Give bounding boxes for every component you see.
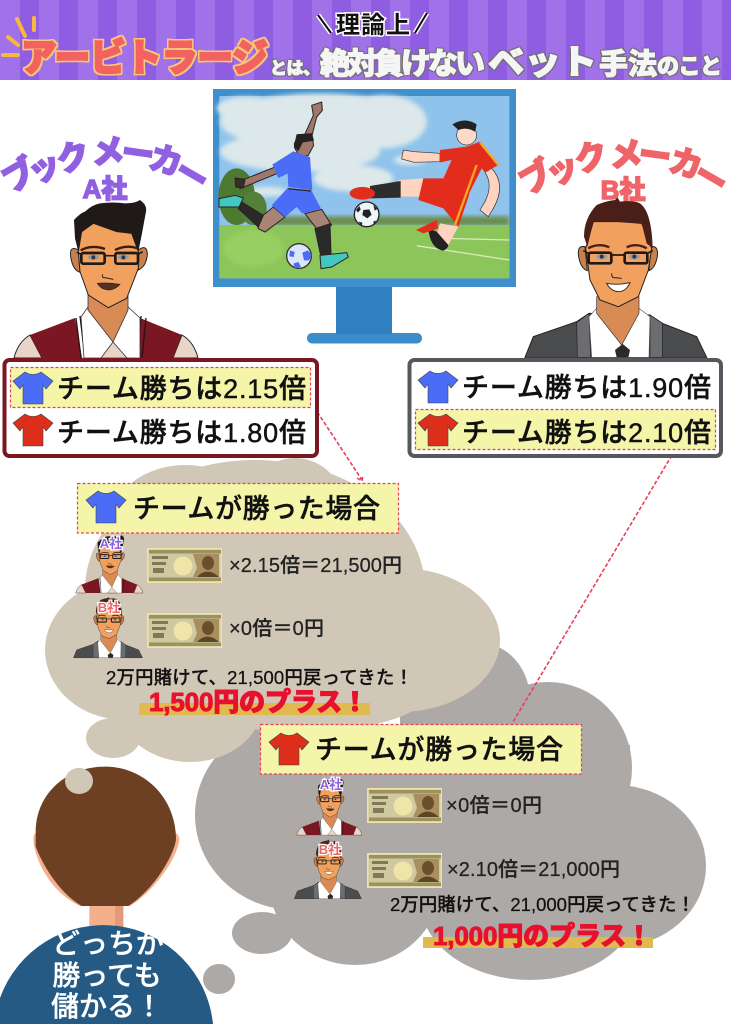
bookmaker A title: ー <box>168 151 215 200</box>
heading: arbitrage: アービトラージ <box>21 37 268 80</box>
row: B payout: ×0倍＝0円 <box>229 617 324 640</box>
highlighted row <box>10 368 310 408</box>
scenario: red team wins <box>260 724 695 951</box>
row: B payout <box>294 840 620 899</box>
person seen from behind <box>0 767 213 1024</box>
connector lines <box>314 407 675 722</box>
row: A payout: ×0倍＝0円 <box>446 794 542 817</box>
icon: red shirt <box>418 414 458 446</box>
heading: theoretically <box>318 12 427 39</box>
monitor with football match <box>213 89 516 344</box>
heading: definition: 手法 <box>599 48 657 81</box>
row: B payout <box>73 597 324 658</box>
icon: blue shirt <box>13 372 53 404</box>
odds: blue team: チーム勝ちは2.15倍 <box>57 374 306 404</box>
red player <box>350 120 500 251</box>
icon: yellow rays <box>3 18 34 55</box>
bookmaker B title: ッ <box>540 146 584 193</box>
odds: red team: チーム勝ちは2.10倍 <box>462 418 711 448</box>
label: チームが勝った場合 <box>315 735 563 765</box>
bookmaker B title: ブ <box>513 153 560 202</box>
bookmaker B title <box>513 135 731 205</box>
row: B payout: B社 <box>319 842 341 857</box>
label <box>260 724 582 774</box>
bookmaker B title: メ <box>609 135 643 174</box>
odds: blue team: チーム勝ちは1.90倍 <box>462 373 711 403</box>
scenario: blue team wins <box>73 484 413 717</box>
bookmaker A title: ー <box>119 133 157 174</box>
panel: bookmaker A odds <box>4 360 317 456</box>
row: A payout: A社 <box>320 777 342 792</box>
blue player <box>219 102 348 269</box>
result text: 2万円賭けて、21,500円戻ってきた！ <box>106 667 413 688</box>
highlight: plus amount: 1,500円のプラス！ <box>149 687 368 717</box>
odds: red team: チーム勝ちは1.80倍 <box>57 418 306 448</box>
bookmaker B title: カ <box>665 141 707 186</box>
icon: blue ball <box>287 244 312 268</box>
caption: 儲かる！ <box>51 991 163 1022</box>
label <box>78 484 398 533</box>
icon: red shirt <box>13 414 53 446</box>
row: B payout: B社 <box>98 600 120 615</box>
bookmaker B title: B社 <box>601 175 645 205</box>
gray thought cloud <box>195 643 706 994</box>
bookmaker A title: A社 <box>83 174 127 204</box>
heading: definition <box>270 44 722 82</box>
bookmaker A title: メ <box>91 132 125 171</box>
heading: definition: 絶対負けない <box>320 48 485 81</box>
highlighted row <box>416 410 716 450</box>
heading: definition: ベット <box>488 44 597 82</box>
heading: definition: のこと <box>657 54 722 79</box>
icon: blue shirt <box>418 371 458 403</box>
character: bookmaker A <box>14 200 198 358</box>
row: A payout: ×2.15倍＝21,500円 <box>229 554 402 577</box>
bookmaker B title: ー <box>636 135 674 176</box>
label: チームが勝った場合 <box>133 494 380 524</box>
heading: definition: とは、 <box>270 59 320 78</box>
row: A payout <box>76 535 402 593</box>
bookmaker A title: カ <box>145 138 187 183</box>
highlight: plus amount: 1,000円のプラス！ <box>433 921 652 951</box>
row: B payout: ×2.10倍＝21,000円 <box>447 858 620 881</box>
bookmaker A title: ッ <box>22 144 66 191</box>
heading: theoretically: 理論上 <box>336 12 410 39</box>
bookmaker B title: ク <box>571 136 612 179</box>
title banner <box>0 0 731 82</box>
screen: sky and field <box>217 93 509 278</box>
caption: どっちが <box>52 928 164 959</box>
bookmaker A title <box>0 132 215 204</box>
character: bookmaker B <box>525 197 707 357</box>
beige thought cloud <box>45 458 500 794</box>
bookmaker A title: ク <box>53 136 94 179</box>
row: A payout <box>297 777 542 835</box>
result text: 2万円賭けて、21,000円戻ってきた！ <box>390 894 695 915</box>
row: A payout: A社 <box>100 536 122 551</box>
panel: bookmaker B odds <box>410 360 721 456</box>
caption <box>51 928 164 1022</box>
icon: black and white ball <box>354 202 379 227</box>
caption: 勝っても <box>52 960 162 991</box>
